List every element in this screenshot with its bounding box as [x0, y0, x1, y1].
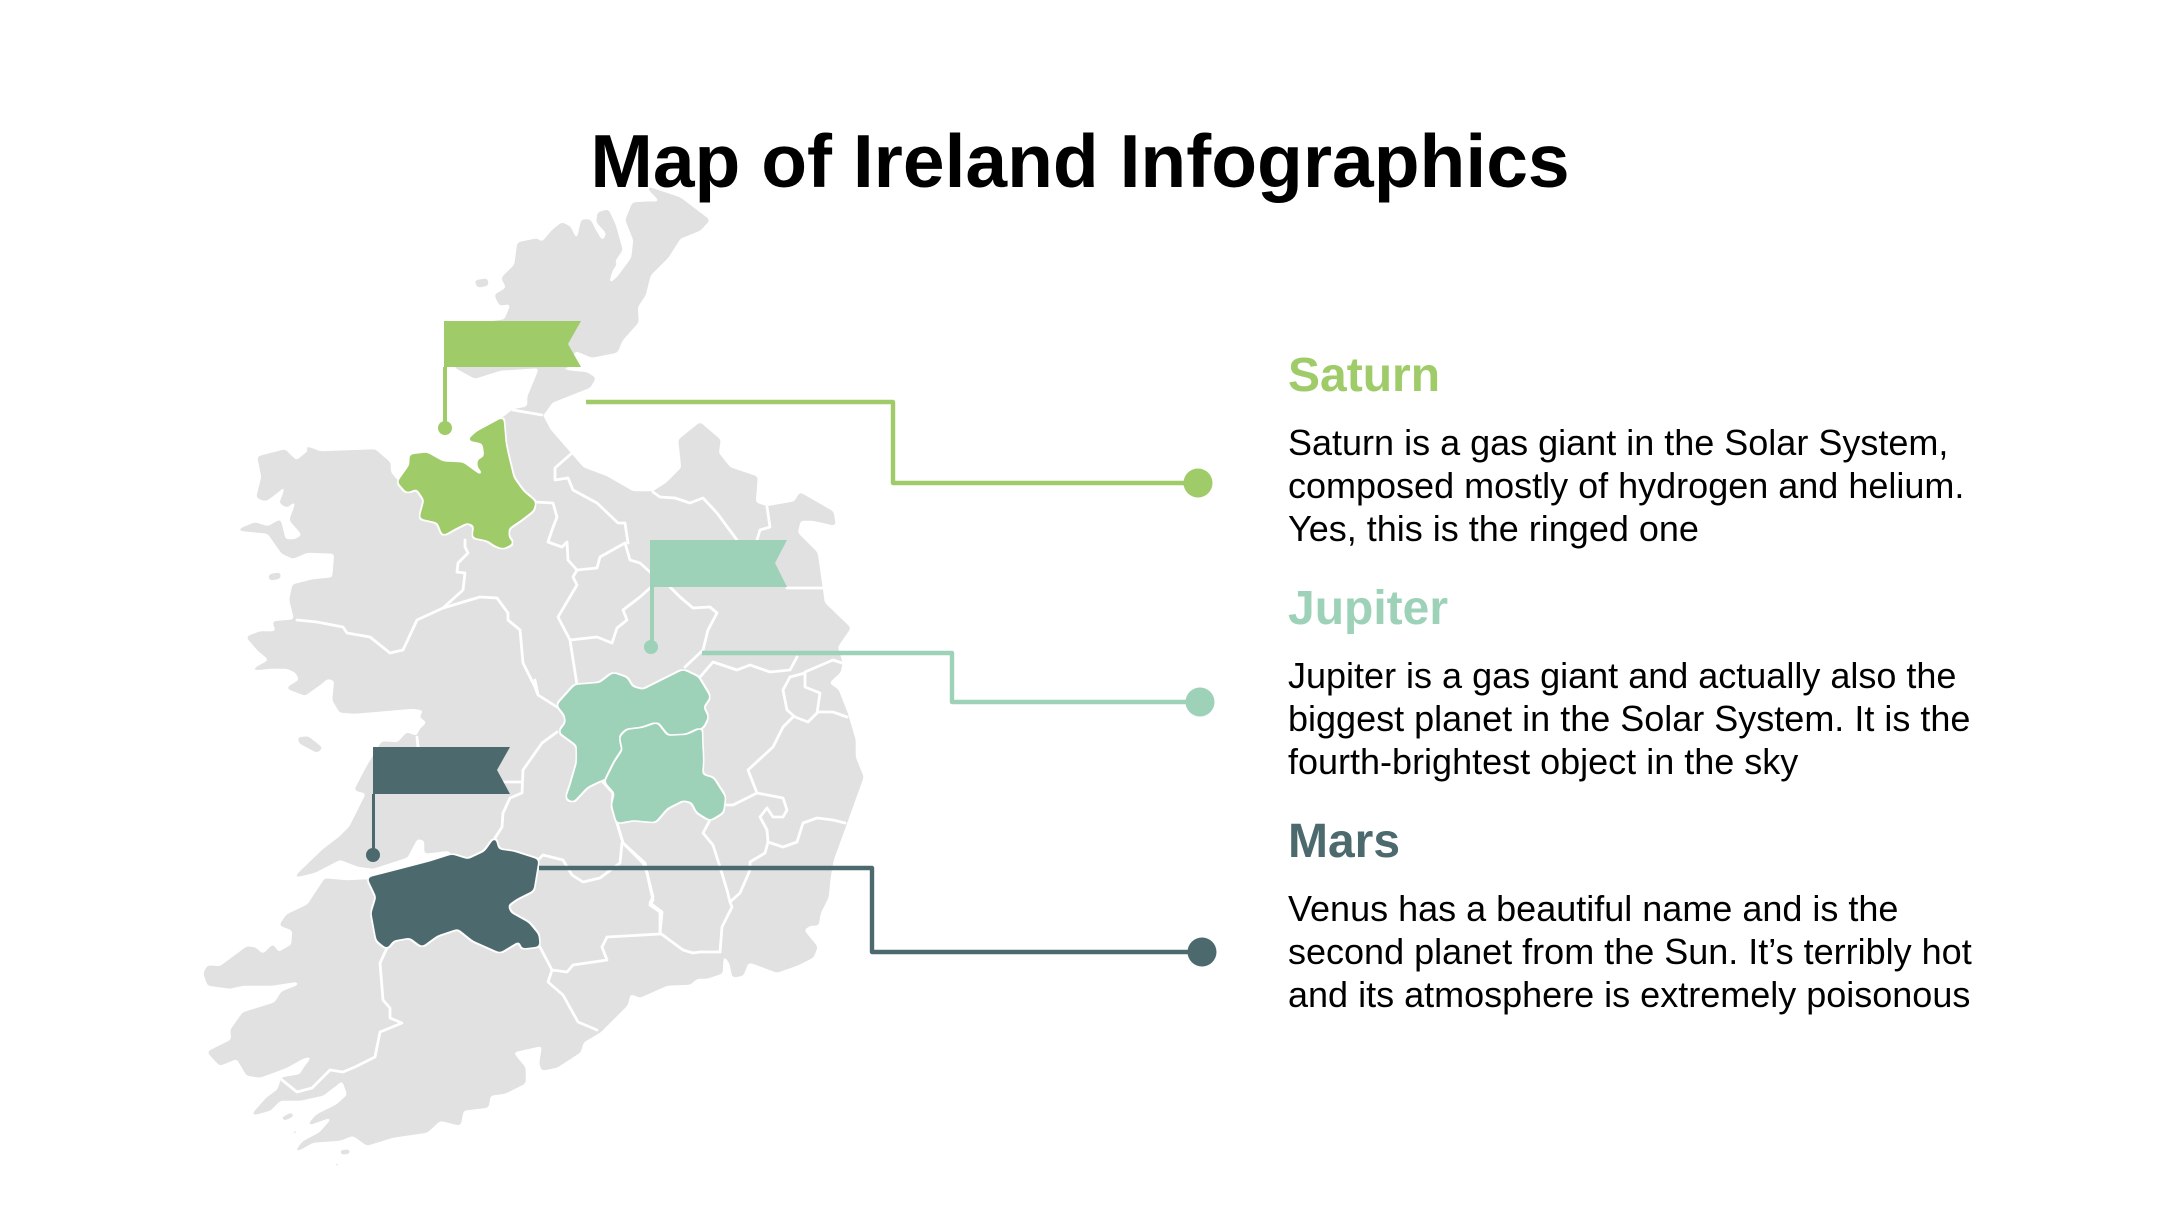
flag: Mars: [366, 747, 510, 862]
region: Jupiter county north: [557, 670, 710, 802]
flag: Jupiter: [644, 540, 787, 654]
flag: Saturn: [438, 321, 581, 435]
text: Saturn description: Saturn is a gas giant in the Solar System,: [1288, 422, 1948, 463]
text: Jupiter description: Jupiter is a gas giant and actually also the: [1288, 655, 1956, 696]
text: Mars description: and its atmosphere is extremely poisonous: [1288, 974, 1970, 1015]
region: Saturn county: [398, 418, 535, 548]
heading: Saturn: Saturn: [1288, 349, 1440, 402]
title: Map of Ireland Infographics: [590, 119, 1570, 203]
text: Jupiter description: biggest planet in the Solar System. It is the: [1288, 698, 1970, 739]
text: Saturn description: composed mostly of hydrogen and helium.: [1288, 465, 1964, 506]
text: Saturn description: Yes, this is the ringed one: [1288, 508, 1699, 549]
panel: Saturn: [1288, 349, 1964, 549]
region: Jupiter county south: [605, 723, 725, 823]
connector: Saturn: [586, 402, 1212, 498]
region: Mars county: [368, 838, 539, 952]
text: Jupiter description: [1288, 655, 1970, 782]
connector: Mars: [539, 868, 1216, 966]
heading: Mars: Mars: [1288, 815, 1400, 868]
text: Saturn description: [1288, 422, 1964, 549]
text: Mars description: Venus has a beautiful name and is the: [1288, 888, 1898, 929]
panel: Jupiter: [1288, 582, 1970, 782]
text: Mars description: second planet from the Sun. It’s terribly hot: [1288, 931, 1972, 972]
panel: Mars: [1288, 815, 1972, 1015]
text: Jupiter description: fourth-brightest object in the sky: [1288, 741, 1798, 782]
heading: Jupiter: Jupiter: [1288, 582, 1448, 635]
county borders: [282, 410, 847, 1092]
text: Mars description: [1288, 888, 1972, 1015]
land: Ireland base map: [204, 187, 863, 1166]
connector: Jupiter: [702, 653, 1214, 716]
